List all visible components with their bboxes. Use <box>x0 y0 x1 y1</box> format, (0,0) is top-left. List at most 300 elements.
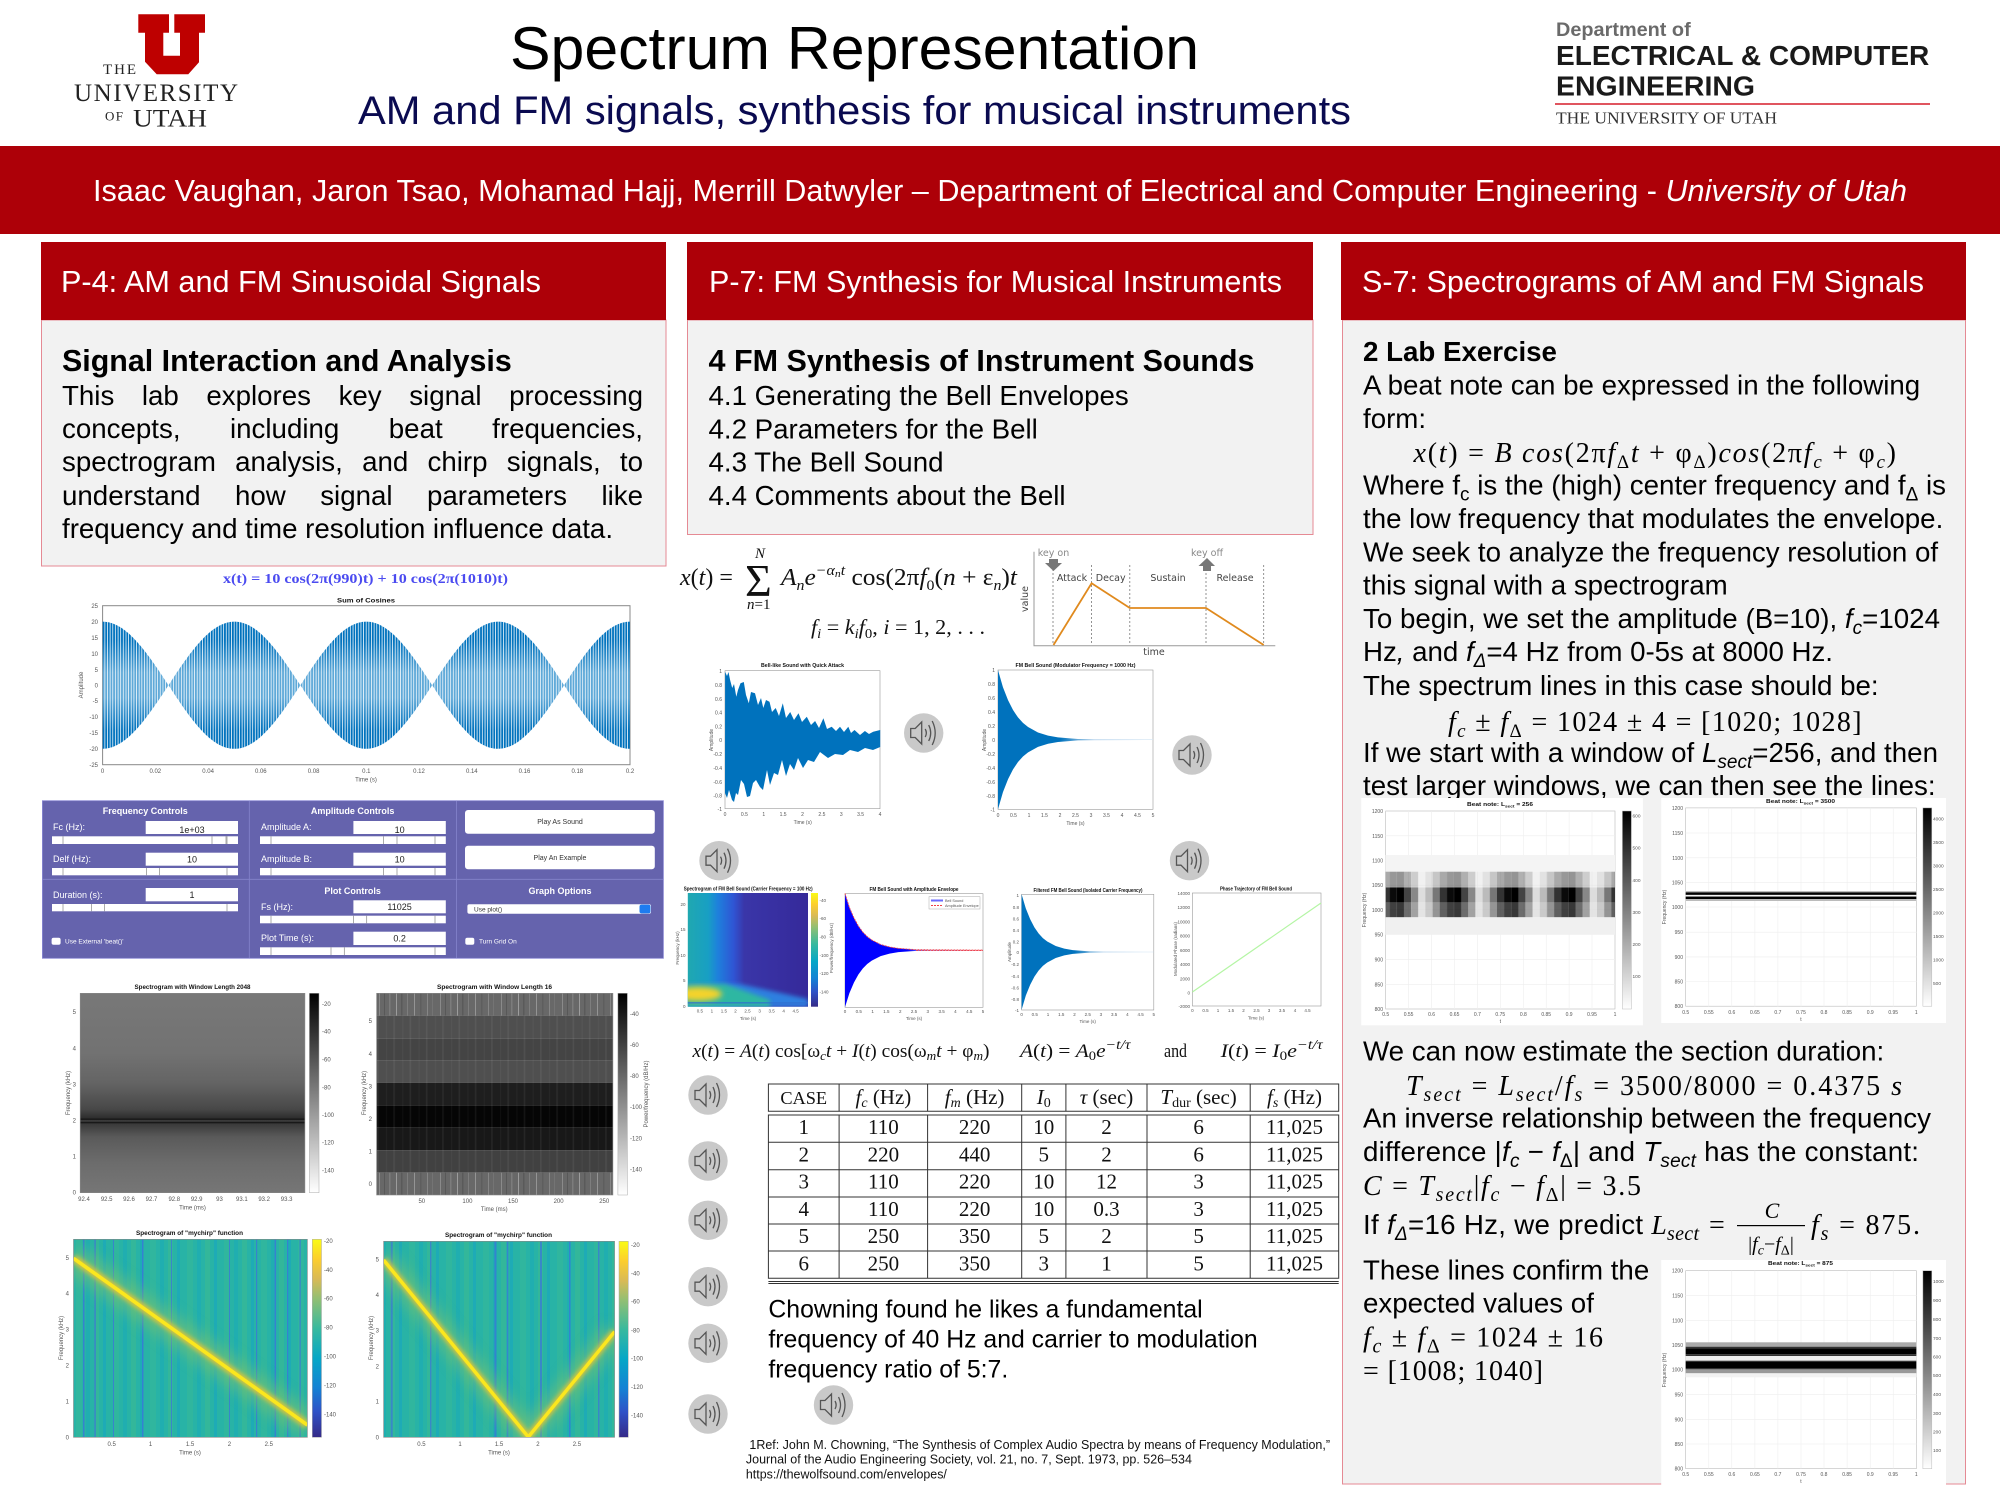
chart: chirp spectrogram V shape: 4 <box>376 1293 380 1299</box>
text: lab exercise introduction: =256, and then <box>1752 737 1938 768</box>
chart: phase trajectory: Modulated Phase (radians) <box>1173 921 1178 976</box>
chart: beat note Lsect 875: 1100 <box>1672 1318 1683 1324</box>
equation: additive bell synthesis: f <box>859 615 868 639</box>
table: FM synthesis cases: CASE <box>780 1088 827 1108</box>
chart: Sum of Cosines waveform: 25 <box>91 604 99 610</box>
table: FM synthesis cases: 3 <box>798 1170 809 1194</box>
chart: phase trajectory: 0.5 <box>1202 1008 1209 1013</box>
text: Chowning finding: frequency ratio of 5:7. <box>768 1357 1008 1384</box>
chart: phase trajectory: 1 <box>1217 1008 1220 1013</box>
panel heading <box>687 242 1313 320</box>
chart: beat note Lsect 256: 0.85 <box>1541 1012 1551 1018</box>
chart: spectrogram window length 2048: -120 <box>322 1141 335 1147</box>
table: FM synthesis cases: (Hz) <box>961 1085 1004 1109</box>
chart: beat note Lsect 875: Frequency (Hz) <box>1662 1352 1668 1387</box>
text: lab exercise introduction: Δ <box>1473 651 1486 672</box>
equation: FM with envelopes: A(t) = A <box>1020 1041 1087 1062</box>
chart: spectrogram window length 16: 100 <box>462 1199 473 1205</box>
chart: chirp spectrogram V shape: -40 <box>631 1271 640 1277</box>
equation: FM with envelopes <box>691 1038 1324 1063</box>
chart: beat note Lsect 256: 0.55 <box>1404 1012 1414 1018</box>
text: Chowning finding: frequency of 40 Hz and carrier to modulation <box>768 1327 1258 1354</box>
chart: phase trajectory: 1.5 <box>1228 1008 1235 1013</box>
text and equation: predicted Lsect: If f <box>1363 1209 1395 1240</box>
text and equation: predicted Lsect: = <box>1709 1210 1725 1241</box>
chart: spectrogram window length 2048: 92.6 <box>123 1197 135 1203</box>
equation: additive bell synthesis: , <box>872 615 883 639</box>
chart: beat note Lsect 3500: 1500 <box>1933 934 1944 940</box>
chart: beat note Lsect 3500: 4000 <box>1933 816 1944 822</box>
panel body <box>688 320 1313 534</box>
equation: FM with envelopes: m <box>973 1048 983 1063</box>
table: FM synthesis cases: 220 <box>959 1170 990 1194</box>
equation: additive bell synthesis: A <box>779 565 797 591</box>
chart: chirp spectrogram descending: Frequency (kHz) <box>59 1316 65 1360</box>
panel: MATLAB GUI controls: Plot Time (s): <box>261 933 314 943</box>
chart: beat note Lsect 3500: sect <box>1804 800 1814 806</box>
chart: beat note Lsect 3500: 0.55 <box>1704 1010 1714 1016</box>
chart: beat note Lsect 256: 200 <box>1632 942 1641 948</box>
chart: bell-like sound with quick attack: 4 <box>879 812 882 818</box>
chart: beat note Lsect 3500: 900 <box>1675 955 1683 961</box>
equation: FM with envelopes: −t/τ <box>1106 1038 1132 1053</box>
chart: beat note Lsect 256: 1000 <box>1372 908 1383 914</box>
equation: FM with envelopes: −t/τ <box>1297 1038 1324 1053</box>
text and equation: predicted Lsect: Δ <box>1394 1224 1408 1245</box>
chart: beat note Lsect 875 <box>1661 1260 1946 1485</box>
table: FM synthesis cases: 350 <box>959 1224 990 1248</box>
chart: FM bell sound modulator 1000 Hz: FM Bell Sound (Modulator Frequency = 1000 Hz) <box>1016 663 1136 669</box>
chart: chirp spectrogram descending: 1 <box>66 1399 70 1405</box>
chart: spectrogram window length 16 <box>362 984 650 1213</box>
chart: beat note Lsect 3500: 0.65 <box>1750 1010 1760 1016</box>
equation: section duration: / <box>1555 1071 1563 1102</box>
table: FM synthesis cases: m <box>951 1096 961 1111</box>
panel: MATLAB GUI controls: 1 <box>189 890 195 900</box>
panel: MATLAB GUI controls: Amplitude Controls <box>311 806 394 816</box>
chart: beat note Lsect 256: 1200 <box>1372 809 1383 815</box>
chart: beat note Lsect 256: 1 <box>1614 1012 1617 1018</box>
chart: bell-like sound with quick attack: 0.2 <box>715 724 722 730</box>
equation: constant C: Δ <box>1546 1184 1559 1206</box>
chart: filtered FM bell sound: -0.6 <box>1011 986 1019 990</box>
chart: filtered FM bell sound: 2 <box>1073 1012 1076 1017</box>
chart: beat note Lsect 3500: 2000 <box>1933 910 1944 916</box>
chart: beat note Lsect 3500: 500 <box>1933 981 1941 987</box>
chart: filtered FM bell sound: -0.8 <box>1011 997 1019 1002</box>
chart: beat note Lsect 875: 600 <box>1933 1355 1941 1361</box>
chart: beat note Lsect 875: 0.7 <box>1774 1472 1782 1478</box>
text: lab exercise introduction: =1024 <box>1862 603 1940 634</box>
chart: beat note Lsect 3500: Frequency (Hz) <box>1662 889 1668 924</box>
chart: filtered FM bell sound: 0 <box>1020 1012 1023 1017</box>
chart: beat note Lsect 875: 1 <box>1915 1472 1918 1478</box>
chart: beat note Lsect 256: 0.95 <box>1587 1012 1597 1018</box>
panel: MATLAB GUI controls <box>42 801 663 958</box>
panel heading <box>41 242 666 320</box>
chart: beat note Lsect 875: 700 <box>1933 1336 1941 1342</box>
text: lab exercise introduction: To begin, we set the amplitude (B=10), f <box>1363 603 1853 634</box>
chart: chirp spectrogram descending: 1.5 <box>186 1442 195 1448</box>
chart: beat note Lsect 875: 0.95 <box>1888 1472 1898 1478</box>
chart: bell-like sound with quick attack <box>709 663 882 826</box>
text: lab exercise introduction <box>1363 370 1946 801</box>
equation: beat note: x(t) = B cos(2πf <box>1414 438 1615 469</box>
equation: additive bell synthesis: k <box>845 615 855 639</box>
chart: chirp spectrogram V shape: 2 <box>536 1442 540 1448</box>
text and equation: confirmation <box>1363 1254 1649 1387</box>
outline list: 4.1 Generating the Bell Envelopes <box>708 380 1129 411</box>
chart: phase trajectory: 2.5 <box>1253 1008 1260 1013</box>
table: FM synthesis cases: 1 <box>1101 1251 1112 1275</box>
panel heading <box>1341 242 1966 320</box>
chart: chirp spectrogram V shape: Spectrogram of "mychirp" function <box>445 1232 552 1239</box>
equation: additive bell synthesis: n=1 <box>747 597 770 613</box>
intro paragraph: frequency and time resolution influence data. <box>62 513 613 544</box>
chart: bell-like sound with quick attack: 0 <box>719 738 722 744</box>
chart: chirp spectrogram descending: 2 <box>228 1442 232 1448</box>
chart: beat note Lsect 3500: 0.75 <box>1796 1010 1806 1016</box>
chart: phase trajectory: Time (s) <box>1248 1016 1265 1020</box>
chart: beat note Lsect 3500: 1100 <box>1672 856 1683 862</box>
equation: additive bell synthesis: −α <box>816 563 836 579</box>
outline list: 4.4 Comments about the Bell <box>708 480 1066 511</box>
icon: speaker <box>688 1201 728 1240</box>
chart: FM bell sound with amplitude envelope <box>844 887 985 1021</box>
text and equation: predicted Lsect: sect <box>1667 1223 1699 1245</box>
chart: chirp spectrogram V shape: 0 <box>376 1435 380 1441</box>
equation: section duration: s <box>1574 1084 1582 1106</box>
equation: spectrum lines: ± <box>1467 707 1499 738</box>
equation: section duration: L <box>1497 1071 1514 1102</box>
equation: section duration: = <box>1463 1071 1496 1102</box>
chart: FM bell sound modulator 1000 Hz: -0.4 <box>986 766 995 772</box>
chart: filtered FM bell sound: -0.2 <box>1011 962 1019 967</box>
chart: Sum of Cosines waveform <box>79 598 635 784</box>
chart: spectrogram window length 2048: 92.4 <box>78 1197 90 1203</box>
chart: bell-like sound with quick attack: 2 <box>801 812 804 818</box>
chart: spectrogram window length 16: -140 <box>630 1167 643 1173</box>
text: references <box>746 1438 1330 1482</box>
chart: beat note Lsect 875: sect <box>1805 1262 1816 1268</box>
chart: spectrogram window length 16: -60 <box>630 1043 639 1049</box>
equation: constant C: f <box>1536 1171 1547 1202</box>
text: inverse relationship: Δ <box>1560 1151 1573 1172</box>
equation: additive bell synthesis: x(t) = <box>679 565 733 591</box>
chart: spectrogram window length 16: -40 <box>630 1012 639 1018</box>
chart: FM bell sound modulator 1000 Hz: 4 <box>1121 813 1124 819</box>
equation: FM with envelopes: I(t) = I <box>1221 1041 1279 1062</box>
chart: beat note Lsect 3500: 1150 <box>1672 831 1683 837</box>
chart: chirp spectrogram descending: Time (s) <box>179 1450 201 1456</box>
chart: chirp spectrogram V shape: -80 <box>631 1328 640 1334</box>
table: FM synthesis cases: 5 <box>1039 1142 1049 1166</box>
table: FM synthesis cases: 250 <box>868 1224 899 1248</box>
chart: filtered FM bell sound: -0.4 <box>1011 974 1019 979</box>
equation: beat note: + φ <box>1824 438 1875 469</box>
chart: filtered FM bell sound <box>1007 888 1156 1024</box>
section heading: Signal Interaction and Analysis <box>62 344 512 378</box>
text and equation: predicted Lsect: s <box>1821 1223 1829 1245</box>
chart: FM bell sound with amplitude envelope: 5 <box>982 1009 985 1014</box>
chart: bell-like sound with quick attack: 0.8 <box>715 683 722 689</box>
panel: MATLAB GUI controls: Duration (s): <box>53 890 103 900</box>
icon: speaker <box>688 1141 728 1181</box>
text and equation: predicted Lsect: = 875. <box>1830 1210 1920 1241</box>
subtitle: AM and FM signals, synthesis for musical instruments <box>358 89 1351 133</box>
panel: MATLAB GUI controls: Turn Grid On <box>479 938 517 946</box>
chart: spectrogram of FM bell sound: Frequency (kHz) <box>675 931 680 965</box>
icon: speaker <box>904 713 943 753</box>
chart: phase trajectory: 2 <box>1242 1008 1245 1013</box>
text: lab exercise introduction: is <box>1918 470 1946 501</box>
table: FM synthesis cases: 11,025 <box>1266 1251 1323 1275</box>
chart: chirp spectrogram V shape: 5 <box>376 1258 380 1264</box>
chart: phase trajectory: 4 <box>1294 1008 1297 1013</box>
chart: spectrogram of FM bell sound: -140 <box>820 990 829 994</box>
table: FM synthesis cases: I <box>1036 1085 1045 1109</box>
chart: beat note Lsect 875: 200 <box>1933 1430 1941 1436</box>
chart: phase trajectory: -2000 <box>1178 1004 1190 1009</box>
banner: authors <box>0 146 2000 234</box>
text: inverse relationship: c <box>1510 1151 1520 1172</box>
table: FM synthesis cases: c <box>861 1096 868 1111</box>
outline list <box>708 380 1129 511</box>
chart: beat note Lsect 256: 500 <box>1632 846 1641 852</box>
chart: beat note Lsect 875: 850 <box>1675 1442 1683 1448</box>
text and equation: predicted Lsect: f <box>1775 1234 1783 1256</box>
chart: spectrogram of FM bell sound: 2.5 <box>744 1008 751 1014</box>
equation: FM with envelopes: e <box>1096 1041 1106 1062</box>
chart: spectrogram of FM bell sound: 5 <box>683 978 686 983</box>
text: references: https://thewolfsound.com/envelopes/ <box>746 1468 947 1482</box>
chart: beat note Lsect 3500: 0.8 <box>1821 1010 1828 1016</box>
chart: spectrogram window length 2048: -20 <box>322 1002 331 1008</box>
chart: FM bell sound modulator 1000 Hz: 0 <box>992 738 995 744</box>
chart: FM bell sound modulator 1000 Hz: Amplitude <box>982 729 988 751</box>
chart: spectrogram window length 16: 250 <box>599 1199 610 1205</box>
text: lab exercise introduction: is the (high) center frequency and f <box>1470 470 1906 501</box>
chart: spectrogram window length 2048 <box>66 984 335 1212</box>
chart: chirp spectrogram V shape: -20 <box>631 1243 640 1249</box>
chart: beat note Lsect 875: 0.5 <box>1682 1472 1689 1478</box>
chart: ADSR envelope: Attack <box>1057 573 1088 584</box>
intro paragraph: This lab explores key signal processing <box>62 380 643 411</box>
chart: chirp spectrogram V shape: 0.5 <box>417 1442 426 1448</box>
chart: Sum of Cosines waveform: 0.06 <box>255 769 267 775</box>
chart: chirp spectrogram V shape: 2.5 <box>573 1442 582 1448</box>
equation: additive bell synthesis: t <box>1010 565 1018 591</box>
icon: speaker <box>1170 841 1209 880</box>
equation: section duration: sect <box>1516 1084 1553 1106</box>
text: lab exercise introduction: Hz, and f <box>1363 636 1474 667</box>
text: inverse relationship: T <box>1643 1136 1662 1167</box>
table: FM synthesis cases <box>768 1084 1339 1284</box>
chart: spectrogram window length 2048: -40 <box>322 1029 331 1035</box>
equation: section duration: s <box>1891 1071 1902 1102</box>
chart: spectrogram of FM bell sound: -120 <box>820 971 829 976</box>
chart: Sum of Cosines waveform: 0.18 <box>571 769 584 775</box>
text: inverse relationship: f <box>1552 1136 1563 1167</box>
chart: spectrogram window length 16: 2 <box>369 1117 373 1123</box>
chart: bell-like sound with quick attack: 2.5 <box>818 812 826 818</box>
equation: additive bell synthesis: e <box>805 565 816 591</box>
chart: beat note Lsect 875: t <box>1800 1479 1802 1485</box>
chart: FM bell sound with amplitude envelope: FM Bell Sound with Amplitude Envelope <box>870 887 959 893</box>
chart: bell-like sound with quick attack: 0.4 <box>715 710 722 716</box>
chart: bell-like sound with quick attack: Time (s) <box>794 820 812 826</box>
table: FM synthesis cases: 2 <box>1101 1142 1112 1166</box>
chart: filtered FM bell sound: 4.5 <box>1137 1012 1144 1017</box>
chart: filtered FM bell sound: 4 <box>1126 1012 1129 1017</box>
icon: speaker <box>688 1394 728 1434</box>
chart: phase trajectory: 2000 <box>1180 976 1190 982</box>
chart: filtered FM bell sound: 3 <box>1100 1012 1103 1017</box>
chart: phase trajectory: 4000 <box>1180 962 1190 967</box>
equation: beat note: ) <box>1707 438 1717 469</box>
chart: FM bell sound with amplitude envelope: 1 <box>871 1009 874 1014</box>
chart: FM bell sound modulator 1000 Hz: -0.6 <box>986 780 995 786</box>
chart: spectrogram window length 2048: -100 <box>322 1113 335 1119</box>
chart: FM bell sound modulator 1000 Hz: 0.6 <box>988 696 995 702</box>
equation: beat note: Δ <box>1693 452 1706 473</box>
chart: spectrogram window length 16: 150 <box>508 1199 519 1205</box>
chart: FM bell sound with amplitude envelope: 4.5 <box>966 1009 973 1014</box>
chart: FM bell sound with amplitude envelope: 3.5 <box>938 1009 945 1014</box>
chart: chirp spectrogram V shape: Frequency (kHz) <box>369 1316 375 1360</box>
table: FM synthesis cases: 11,025 <box>1266 1142 1323 1166</box>
chart: spectrogram window length 2048: -140 <box>322 1169 335 1175</box>
table: FM synthesis cases: 6 <box>798 1251 809 1275</box>
equation: FM with envelopes: t <box>936 1041 942 1062</box>
outline list: 4.3 The Bell Sound <box>708 447 944 478</box>
chart: ADSR envelope: time <box>1143 647 1165 658</box>
table: FM synthesis cases: 10 <box>1033 1115 1054 1139</box>
chart: bell-like sound with quick attack: 0.5 <box>741 812 748 818</box>
chart: phase trajectory: 3 <box>1268 1008 1271 1013</box>
chart: chirp spectrogram V shape: 3 <box>376 1329 380 1335</box>
text: inverse relationship: difference |f <box>1363 1136 1510 1167</box>
chart: beat note Lsect 875: Beat note: L <box>1768 1261 1800 1267</box>
chart: spectrogram of FM bell sound: 3.5 <box>768 1008 775 1014</box>
chart: beat note Lsect 3500: 950 <box>1675 930 1683 936</box>
chart: beat note Lsect 875: 0.55 <box>1704 1472 1714 1478</box>
chart: beat note Lsect 875: 0.6 <box>1728 1472 1735 1478</box>
chart: chirp spectrogram descending: -80 <box>324 1325 333 1331</box>
chart: ADSR envelope: value <box>1020 586 1031 612</box>
chart: spectrogram window length 2048: 0 <box>73 1191 77 1197</box>
chart: chirp spectrogram descending <box>59 1230 337 1456</box>
text and equation: confirmation: Δ <box>1427 1336 1440 1358</box>
chart: beat note Lsect 875: 800 <box>1933 1317 1941 1323</box>
panel: MATLAB GUI controls: Play An Example <box>534 855 587 862</box>
equation: spectrum lines: f <box>1448 707 1459 738</box>
table: FM synthesis cases: 11,025 <box>1266 1115 1323 1139</box>
chart: beat note Lsect 256: 0.75 <box>1495 1012 1505 1018</box>
chart: beat note Lsect 256 <box>1361 798 1643 1025</box>
chart: chirp spectrogram descending: -140 <box>324 1412 337 1418</box>
chart: beat note Lsect 875: 1200 <box>1672 1269 1683 1275</box>
chart: FM bell sound modulator 1000 Hz: Time (s) <box>1066 821 1085 827</box>
chart: filtered FM bell sound: 0 <box>1016 950 1019 955</box>
chart: spectrogram window length 2048: -60 <box>322 1057 331 1063</box>
equation: beat note: ) <box>1887 438 1896 469</box>
logo wordmark <box>74 62 238 133</box>
text: inverse relationship: has the constant: <box>1696 1136 1919 1167</box>
chart: ADSR envelope: key off <box>1191 548 1223 559</box>
equation: additive bell synthesis: n + ε <box>943 565 991 591</box>
banner: authors: Isaac Vaughan, Jaron Tsao, Mohamad Hajj, Merrill Datwyler – Department of Electrical and Computer Engineering - University of Utah <box>93 173 1907 208</box>
chart: bell-like sound with quick attack: -0.4 <box>713 766 722 772</box>
chart: chirp spectrogram descending: 4 <box>66 1292 70 1298</box>
chart: phase trajectory: 4.5 <box>1304 1008 1311 1013</box>
table: FM synthesis cases: 110 <box>868 1197 899 1221</box>
text: inverse relationship: | and <box>1573 1136 1643 1167</box>
table: FM synthesis cases: 220 <box>868 1142 899 1166</box>
chart: spectrogram of FM bell sound: 4.5 <box>792 1008 799 1014</box>
chart: FM bell sound with amplitude envelope: 0.5 <box>856 1009 862 1014</box>
chart: filtered FM bell sound: 1 <box>1047 1012 1050 1017</box>
equation: constant C: f <box>1481 1171 1492 1202</box>
text and equation: predicted Lsect: − <box>1764 1234 1775 1256</box>
table: FM synthesis cases: 2 <box>1101 1115 1112 1139</box>
chart: phase trajectory: 8000 <box>1180 934 1190 938</box>
table: FM synthesis cases: τ (sec) <box>1080 1085 1133 1109</box>
panel: MATLAB GUI controls: 10 <box>395 854 405 864</box>
table: FM synthesis cases: (Hz) <box>868 1085 911 1109</box>
chart: spectrogram window length 2048: 93.2 <box>258 1197 271 1203</box>
text and equation: confirmation: = [1008; 1040] <box>1363 1356 1543 1387</box>
chart: chirp spectrogram V shape: -60 <box>631 1300 640 1306</box>
panel: MATLAB GUI controls: 1e+03 <box>179 825 205 835</box>
chart: Sum of Cosines waveform: -10 <box>89 715 99 721</box>
chart: bell-like sound with quick attack: -0.8 <box>713 794 722 800</box>
chart: spectrogram of FM bell sound: 1 <box>711 1008 714 1014</box>
text and equation: confirmation: f <box>1363 1323 1374 1354</box>
equation: FM with envelopes: e <box>1287 1041 1297 1062</box>
table: FM synthesis cases: 110 <box>868 1115 899 1139</box>
chart: beat note Lsect 256: 1150 <box>1372 834 1383 840</box>
chart: beat note Lsect 256: 400 <box>1632 878 1641 884</box>
chart: bell-like sound with quick attack: 3 <box>840 812 843 818</box>
chart: chirp spectrogram descending: -120 <box>324 1383 337 1389</box>
equation: additive bell synthesis: 0 <box>927 578 935 594</box>
chart: FM bell sound modulator 1000 Hz: 2 <box>1059 813 1062 819</box>
chart: beat note Lsect 875: 300 <box>1933 1411 1941 1417</box>
text: inverse relationship <box>1363 1103 1931 1172</box>
text and equation: confirmation: These lines confirm the <box>1363 1254 1649 1285</box>
chart: FM bell sound modulator 1000 Hz: 3 <box>1090 813 1093 819</box>
text: references: Journal of the Audio Engineering Society, vol. 21, no. 7, Sept. 1973, pp. 526–534 <box>746 1453 1192 1467</box>
chart: chirp spectrogram V shape: 1 <box>376 1400 380 1406</box>
chart: spectrogram of FM bell sound: -60 <box>820 916 827 921</box>
section heading: 2 Lab Exercise <box>1363 336 1557 367</box>
panel: MATLAB GUI controls: Amplitude A: <box>261 822 312 832</box>
table: FM synthesis cases: f <box>945 1085 954 1109</box>
chart: beat note Lsect 256: 100 <box>1632 974 1641 980</box>
table: FM synthesis cases: 0.3 <box>1093 1197 1120 1221</box>
table: FM synthesis cases: 440 <box>959 1142 990 1166</box>
text and equation: predicted Lsect: f <box>1811 1210 1822 1241</box>
chart: spectrogram of FM bell sound: 3 <box>758 1008 761 1014</box>
chart: FM bell sound modulator 1000 Hz: 1 <box>992 668 995 674</box>
equation: FM with envelopes: ) <box>983 1041 990 1062</box>
chart: Sum of Cosines waveform: -5 <box>93 699 99 705</box>
icon: speaker <box>699 841 739 880</box>
text: lab exercise introduction: sect <box>1717 752 1753 773</box>
text and equation: predicted Lsect: | <box>1790 1234 1794 1256</box>
text: lab exercise introduction: If we start with a window of L <box>1363 737 1717 768</box>
